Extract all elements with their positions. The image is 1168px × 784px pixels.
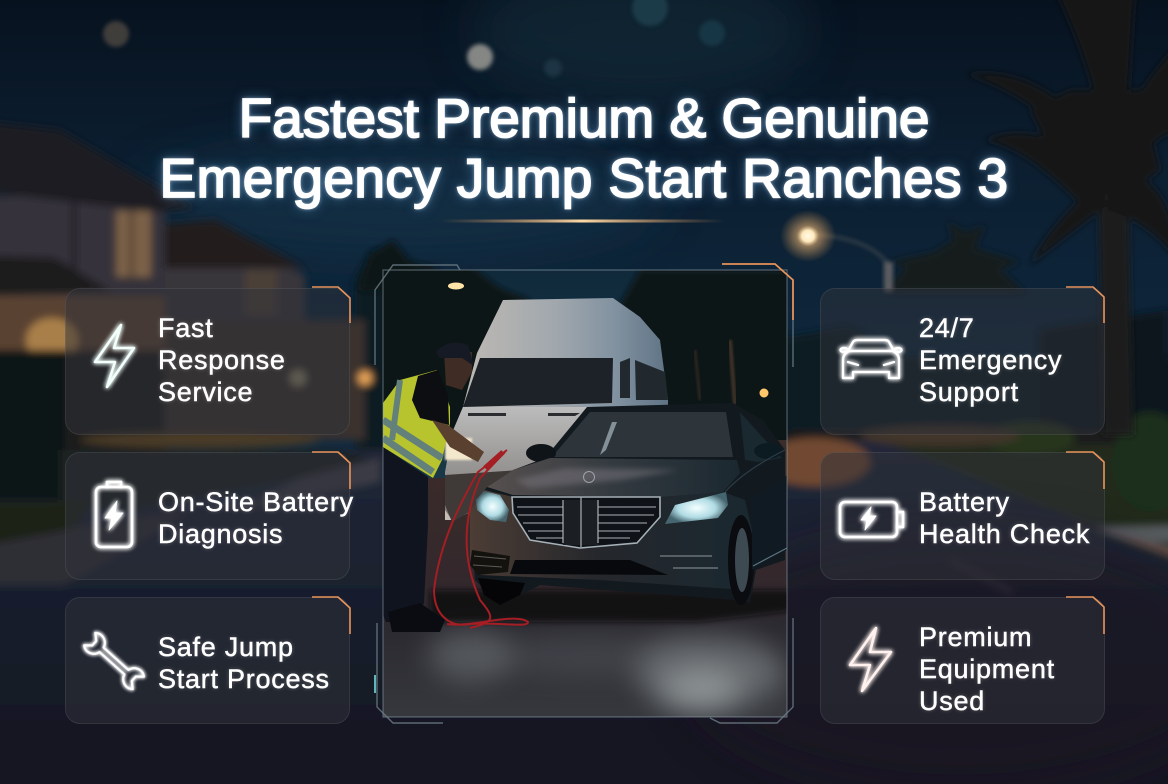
technician xyxy=(383,343,484,632)
icon: vertical battery xyxy=(96,482,132,547)
text: 24/7 Emergency Support: Support xyxy=(919,377,1019,407)
service van xyxy=(445,298,668,522)
text: Safe Jump Start Process: Start Process xyxy=(158,664,330,694)
sky and trees xyxy=(384,271,633,478)
title line 2: Emergency Jump Start Ranches 3 xyxy=(160,147,1008,209)
text: Fast Response Service xyxy=(158,313,286,407)
text: On-Site Battery Diagnosis: On-Site Battery xyxy=(158,487,354,517)
title line 1: Fastest Premium & Genuine xyxy=(239,87,929,149)
text: On-Site Battery Diagnosis: Diagnosis xyxy=(158,519,283,549)
text: Battery Health Check: Health Check xyxy=(919,519,1090,549)
text: 24/7 Emergency Support xyxy=(919,313,1062,408)
panel: On-Site Battery Diagnosis xyxy=(65,452,350,580)
text: Fast Response Service: Response xyxy=(158,345,286,375)
panel: Battery Health Check xyxy=(820,452,1105,580)
grille xyxy=(512,497,660,548)
distant trees xyxy=(355,250,1168,470)
palm trees xyxy=(358,0,1168,435)
jumper cables xyxy=(434,450,528,628)
icon: wrench xyxy=(83,631,145,691)
icon: horizontal battery xyxy=(840,502,903,537)
right verge xyxy=(790,430,1168,448)
text: On-Site Battery Diagnosis xyxy=(157,487,354,550)
central photo: technician jump-starting a black sedan xyxy=(374,263,794,724)
text: 24/7 Emergency Support: 24/7 xyxy=(919,313,975,343)
text: Safe Jump Start Process: Safe Jump xyxy=(158,632,294,662)
text: Safe Jump Start Process xyxy=(158,632,330,694)
text: Premium Equipment Used: Used xyxy=(919,686,985,716)
street lamp xyxy=(815,235,889,266)
road xyxy=(0,450,1168,784)
panel: Safe Jump Start Process xyxy=(65,597,350,724)
panel: Fast Response Service xyxy=(65,288,350,435)
text: Battery Health Check xyxy=(919,487,1090,549)
icon: lightning bolt xyxy=(95,325,134,387)
text: Fast Response Service: Fast xyxy=(158,313,214,343)
corner accents xyxy=(312,287,1104,634)
text: Premium Equipment Used: Premium xyxy=(919,622,1032,652)
panel: 24/7 Emergency Support xyxy=(820,288,1105,435)
icon: car xyxy=(840,340,902,378)
panel: Premium Equipment Used xyxy=(820,597,1105,724)
asphalt xyxy=(375,478,795,723)
text: Battery Health Check: Battery xyxy=(919,487,1010,517)
icon: premium bolt xyxy=(850,628,891,691)
text: Fast Response Service: Service xyxy=(158,377,253,407)
sedan xyxy=(470,403,787,605)
title xyxy=(156,87,1012,215)
text: 24/7 Emergency Support: Emergency xyxy=(919,345,1062,375)
text: Premium Equipment Used: Equipment xyxy=(919,654,1055,684)
left houses xyxy=(0,196,165,350)
photo frame xyxy=(383,270,787,717)
text: Premium Equipment Used xyxy=(919,622,1055,716)
